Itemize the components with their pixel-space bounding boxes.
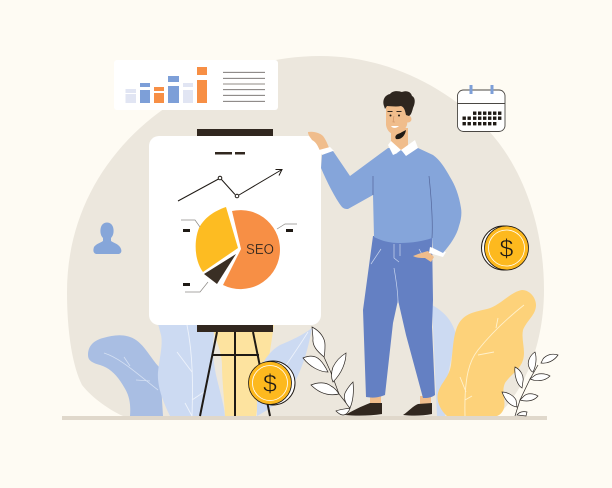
pie callouts bbox=[181, 220, 297, 292]
easel bbox=[197, 129, 273, 416]
bars bbox=[126, 67, 207, 103]
hand in pocket bbox=[413, 251, 434, 262]
person bbox=[308, 91, 461, 416]
coin: right bbox=[482, 226, 528, 270]
eyes and mouth bbox=[388, 112, 402, 128]
line chart bbox=[178, 170, 282, 201]
neck bbox=[391, 128, 408, 152]
leaf: pale yellow bbox=[212, 325, 274, 416]
background blob bbox=[67, 56, 544, 416]
board heading dashes bbox=[215, 152, 245, 154]
shoes bbox=[345, 403, 432, 416]
icon: user bbox=[93, 222, 121, 254]
leaf: pale blue behind yellow leaf bbox=[432, 305, 456, 416]
floor bbox=[62, 416, 547, 420]
text lines bbox=[223, 72, 265, 101]
cuff: hip bbox=[429, 247, 446, 257]
leaf: pale blue tall bbox=[157, 320, 225, 416]
leaf: left blue bbox=[88, 335, 163, 416]
hair bbox=[383, 91, 415, 116]
coin: right: $ bbox=[500, 235, 514, 263]
plant: centre bbox=[303, 327, 353, 415]
hand on board bbox=[308, 132, 329, 151]
presentation board bbox=[149, 136, 321, 325]
ear bbox=[404, 116, 412, 122]
pie chart bbox=[196, 207, 280, 289]
leaf: pale blue right of easel bbox=[257, 328, 312, 416]
ankles bbox=[370, 396, 431, 405]
plant: right bbox=[502, 352, 558, 416]
sweater bbox=[321, 148, 461, 253]
leaf: yellow right bbox=[437, 290, 536, 416]
face bbox=[386, 106, 408, 134]
bar chart card bbox=[114, 60, 278, 110]
trousers bbox=[363, 236, 435, 398]
icon: calendar bbox=[458, 85, 505, 132]
pie label: SEO bbox=[246, 242, 274, 258]
collar bbox=[388, 140, 418, 157]
cuff: raised bbox=[319, 147, 334, 155]
coin: bottom bbox=[248, 361, 295, 405]
coin: bottom: $ bbox=[263, 370, 277, 398]
beard shadow bbox=[395, 130, 406, 139]
